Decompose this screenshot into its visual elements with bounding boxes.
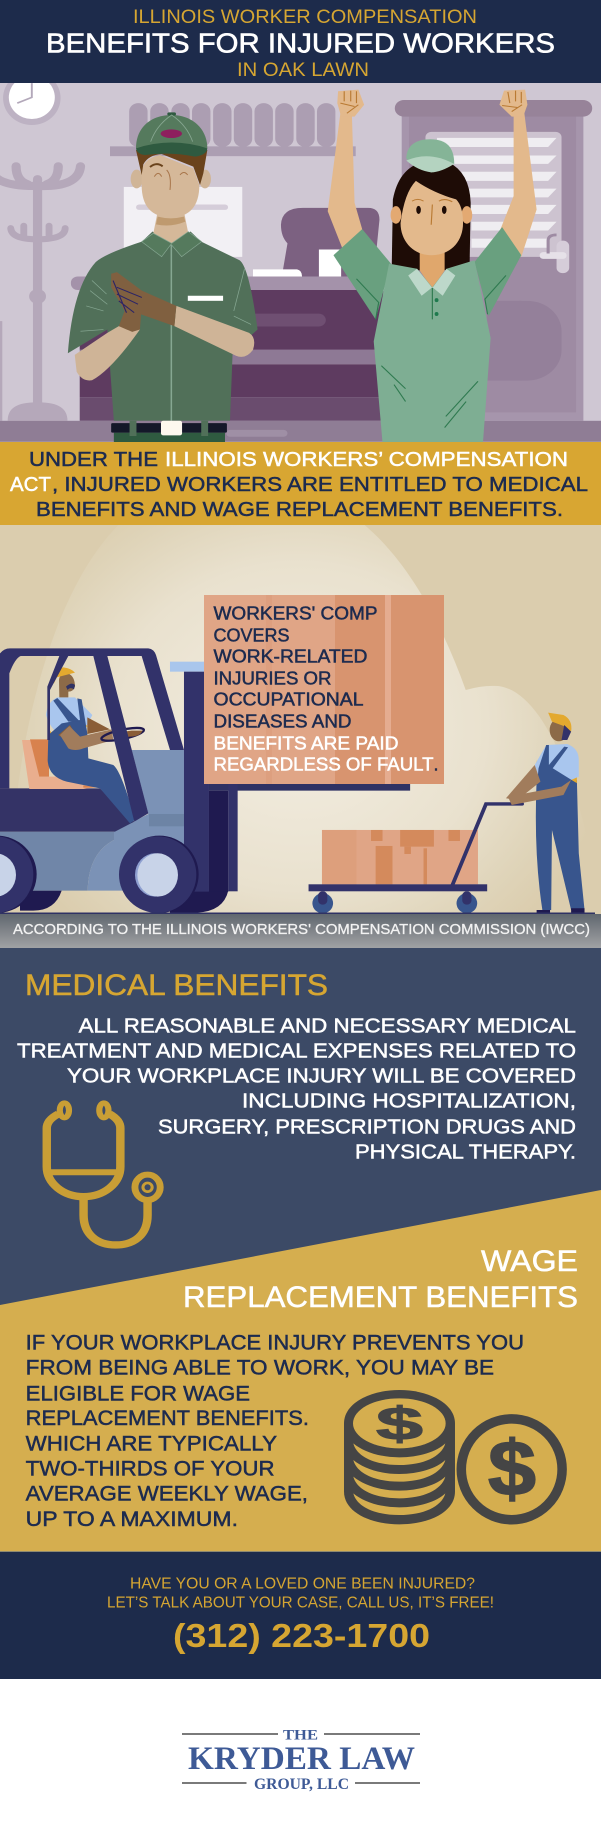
icon: dollar coin: $ — [488, 1424, 536, 1512]
reception desk — [71, 276, 383, 421]
ground line — [0, 912, 595, 914]
shelf with binders — [110, 103, 356, 156]
floor — [0, 421, 601, 442]
wage benefits text: UP TO A MAXIMUM. — [26, 1508, 238, 1531]
medical benefits text: ALL REASONABLE AND NECESSARY MEDICAL — [79, 1016, 576, 1038]
phone number: (312) 223-1700 — [173, 1617, 430, 1654]
logo: the Kryder Law Group: KRYDER LAW — [188, 1741, 415, 1777]
call to action text — [107, 1575, 494, 1612]
heading: wage replacement benefits: REPLACEMENT BENEFITS — [183, 1281, 578, 1314]
medical benefits text — [17, 1016, 576, 1163]
warehouse background domes — [10, 525, 601, 913]
wage benefits text: FROM BEING ABLE TO WORK, YOU MAY BE — [26, 1356, 494, 1379]
icon: stack of coins: $ — [376, 1397, 423, 1449]
call to action panel — [0, 1551, 601, 1679]
source band — [0, 914, 601, 948]
paper on wall — [124, 187, 242, 257]
icon: stack of coins — [344, 1390, 455, 1524]
wage benefits text: WHICH ARE TYPICALLY — [26, 1432, 277, 1456]
worker: woman in light green uniform raising fists — [328, 90, 537, 443]
fork carrying the box — [209, 784, 410, 791]
box label text: workers' comp covers: WORKERS' COMP — [214, 603, 378, 623]
office chair — [281, 208, 379, 277]
wage benefits text: ELIGIBLE FOR WAGE — [26, 1382, 250, 1405]
intro statement band — [0, 442, 601, 525]
worker pushing cart — [506, 713, 585, 914]
cart with boxes — [309, 804, 522, 913]
worker: man body in green uniform — [68, 232, 258, 443]
heading: wage replacement benefits: WAGE — [481, 1245, 578, 1278]
logo: the Kryder Law Group — [182, 1727, 420, 1793]
box label text: workers' comp covers: . — [434, 755, 439, 775]
cab frame — [0, 648, 184, 822]
icon: wall clock — [3, 71, 61, 125]
medical benefits text: YOUR WORKPLACE INJURY WILL BE COVERED — [67, 1066, 576, 1088]
statement line 1: UNDER THE — [29, 448, 158, 471]
title: BENEFITS FOR INJURED WORKERS — [46, 27, 555, 58]
monitor on desk — [253, 249, 341, 276]
box label text: workers' comp covers: DISEASES AND — [214, 712, 352, 732]
medical benefits text: PHYSICAL THERAPY. — [355, 1141, 576, 1163]
panel: medical benefits — [0, 948, 601, 1308]
wage benefits text: IF YOUR WORKPLACE INJURY PREVENTS YOU — [26, 1331, 524, 1354]
logo: the Kryder Law Group: THE — [283, 1727, 318, 1743]
driver — [46, 667, 145, 823]
medical benefits text: INCLUDING HOSPITALIZATION, — [242, 1091, 576, 1113]
panel: wage replacement benefits — [0, 1190, 601, 1552]
wage benefits text: TWO-THIRDS OF YOUR — [26, 1457, 275, 1480]
box label text: workers' comp covers: COVERS — [214, 626, 290, 646]
box label text: workers' comp covers: BENEFITS ARE PAID — [214, 733, 398, 753]
statement line 2: ACT — [10, 473, 51, 496]
mast — [170, 662, 238, 892]
icon: stethoscope — [47, 1103, 160, 1245]
icon: dollar coin — [461, 1419, 562, 1520]
wage benefits text: AVERAGE WEEKLY WAGE, — [26, 1482, 308, 1505]
heading: wage replacement benefits — [183, 1245, 578, 1314]
header line: In Oak Lawn: IN OAK LAWN — [237, 59, 369, 81]
illustration: office with two workers celebrating — [0, 71, 601, 443]
rear wheel shadows — [20, 891, 228, 913]
wage benefits text — [26, 1331, 524, 1531]
statement line 2: , INJURED WORKERS ARE ENTITLED TO MEDICAL — [52, 473, 588, 496]
medical benefits text: SURGERY, PRESCRIPTION DRUGS AND — [158, 1116, 576, 1138]
worker: man head with cap — [131, 112, 211, 257]
box label text: workers' comp covers: OCCUPATIONAL — [214, 690, 364, 710]
forklift wheels — [0, 836, 199, 913]
call to action text: LET’S TALK ABOUT YOUR CASE, CALL US, IT’S FREE! — [107, 1594, 494, 1612]
call to action text: HAVE YOU OR A LOVED ONE BEEN INJURED? — [130, 1575, 475, 1592]
box label text: workers' comp covers: REGARDLESS OF FAULT — [214, 755, 434, 775]
statement line 1: ILLINOIS WORKERS’ COMPENSATION — [165, 448, 568, 471]
logo: the Kryder Law Group: GROUP, LLC — [254, 1776, 349, 1793]
header line: Illinois Worker Compensation: ILLINOIS WORKER COMPENSATION — [133, 6, 477, 28]
illustration: warehouse with forklift and cart — [0, 525, 601, 915]
seat — [22, 739, 100, 789]
forklift — [0, 648, 238, 913]
statement line 1 — [29, 448, 568, 471]
header banner — [0, 0, 601, 83]
medical benefits text: TREATMENT AND MEDICAL EXPENSES RELATED TO — [17, 1040, 576, 1062]
door with blinds — [395, 100, 592, 421]
box label text: workers' comp covers: WORK-RELATED — [214, 647, 368, 667]
source band: ACCORDING TO THE ILLINOIS WORKERS' COMPENSATION COMMISSION (IWCC) — [13, 922, 590, 938]
heading: medical benefits: MEDICAL BENEFITS — [25, 969, 328, 1002]
forklift body panels — [0, 750, 184, 891]
box label text: workers' comp covers: INJURIES OR — [214, 668, 332, 688]
statement line 3: BENEFITS AND WAGE REPLACEMENT BENEFITS. — [36, 498, 563, 521]
coat rack — [0, 166, 80, 421]
box label text: workers' comp covers — [204, 595, 444, 784]
wage benefits text: REPLACEMENT BENEFITS. — [26, 1407, 309, 1430]
